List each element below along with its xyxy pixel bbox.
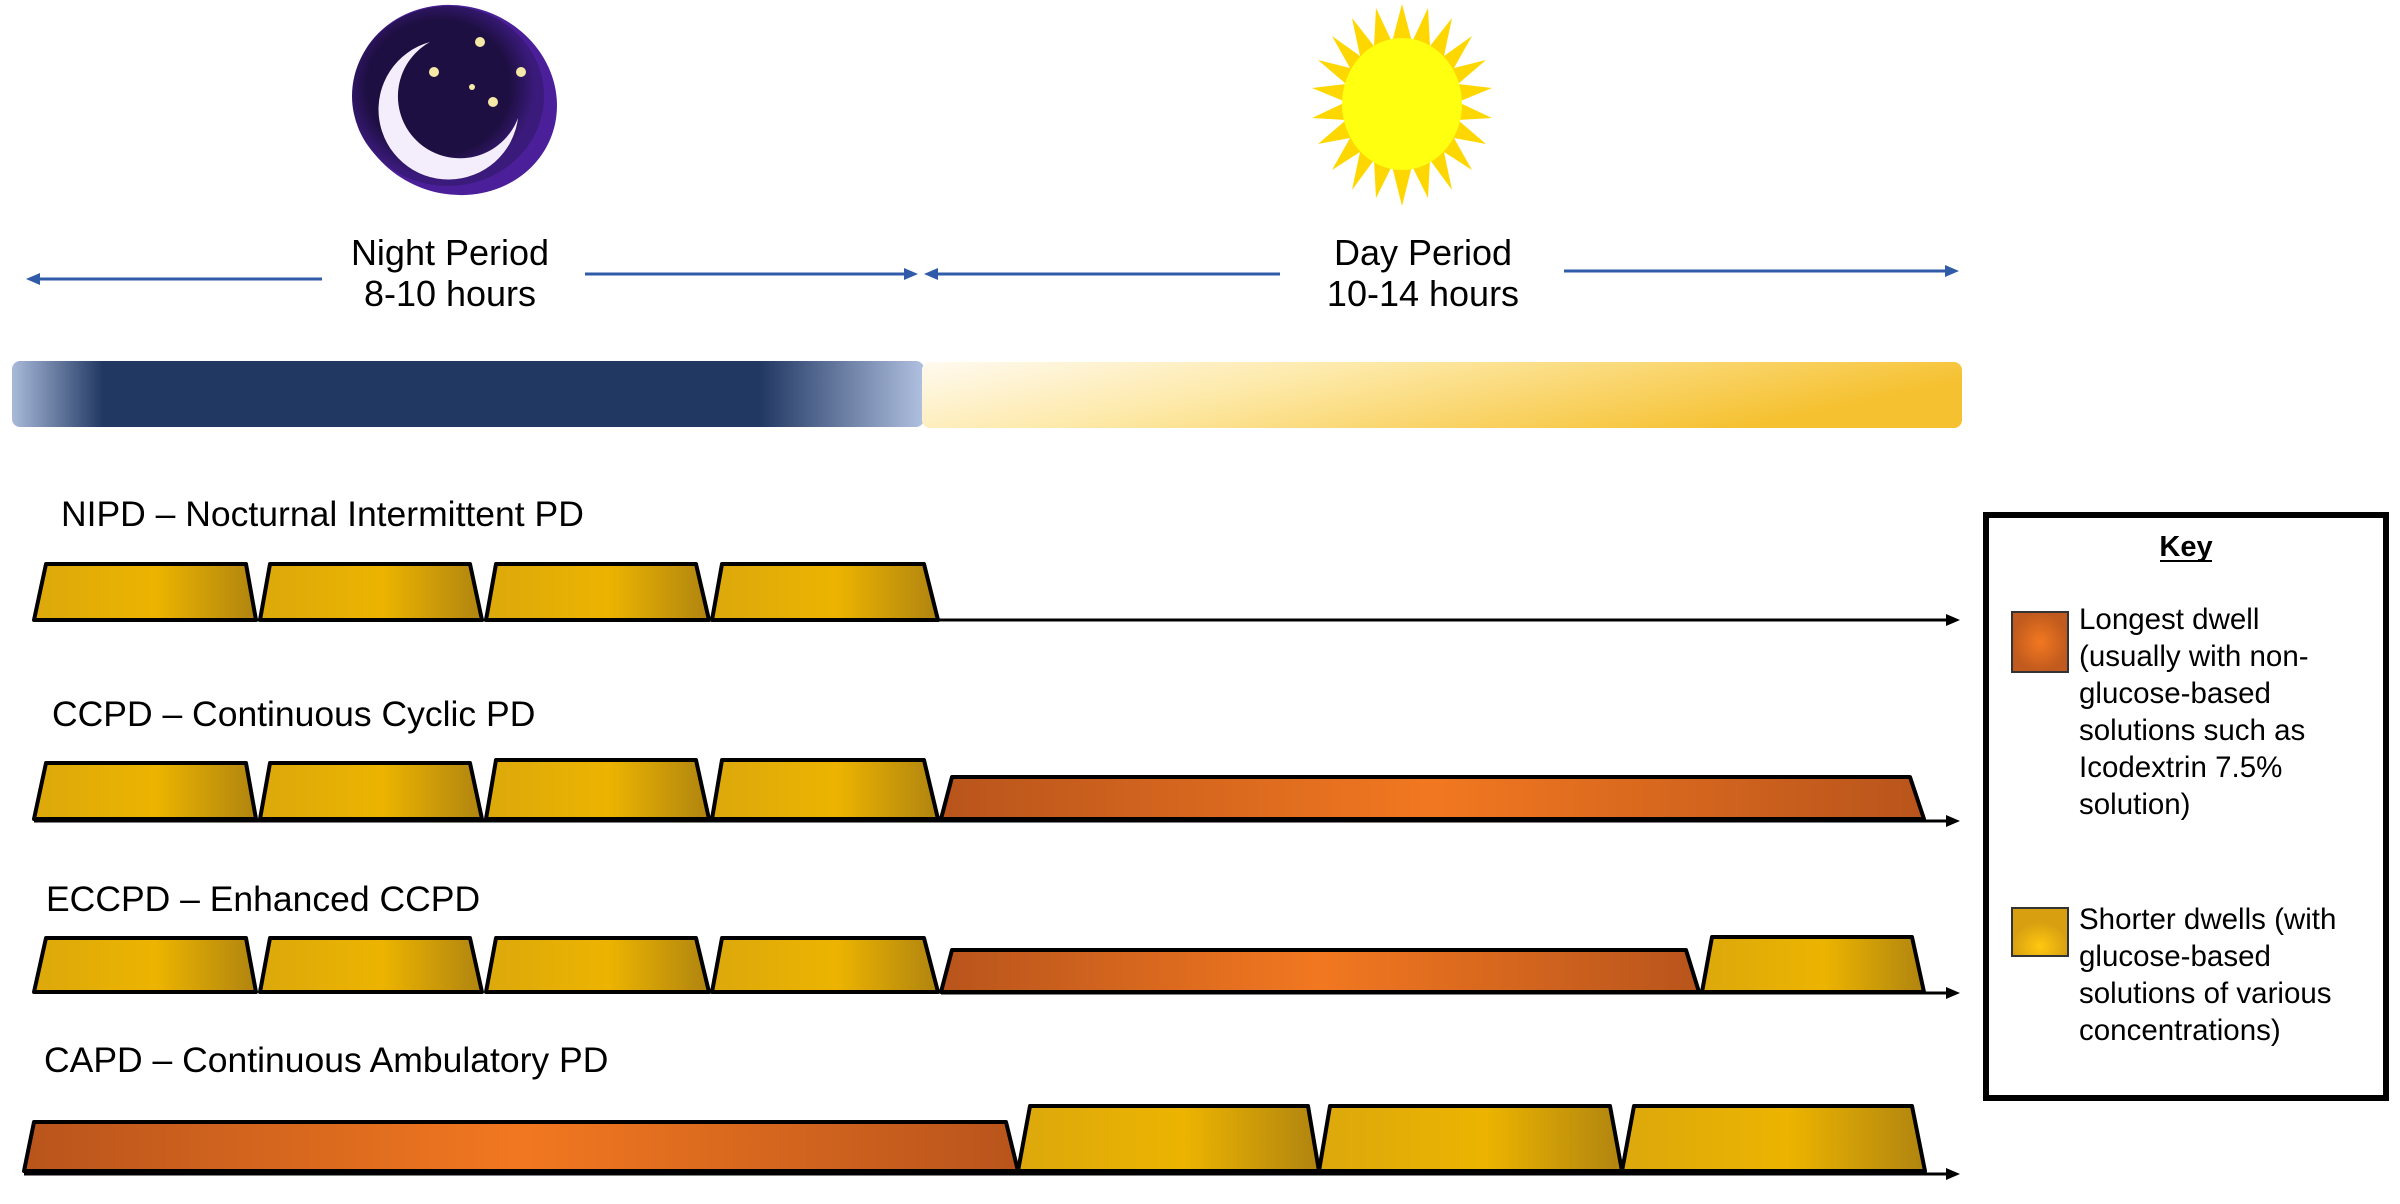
key swatch: shorter dwells (2012, 908, 2068, 956)
bar: day (922, 362, 1962, 428)
row: CAPD (24, 1040, 1960, 1180)
row: NIPD: NIPD – Nocturnal Intermittent PD (61, 494, 584, 534)
key text: longest dwell: Icodextrin 7.5% (2079, 751, 2282, 784)
key title: Key (2159, 531, 2213, 563)
key text: longest dwell: solution) (2079, 788, 2191, 821)
row: NIPD (34, 494, 1960, 626)
text: night period: 8-10 hours (364, 273, 536, 314)
key text: shorter dwells: Shorter dwells (with (2079, 903, 2336, 936)
key text: longest dwell: Longest dwell (2079, 603, 2259, 636)
icon: moon (326, 0, 584, 224)
bar: night (12, 361, 924, 427)
key text: longest dwell: glucose-based (2079, 677, 2271, 710)
row: ECCPD (34, 879, 1960, 999)
key swatch: longest dwell (2012, 612, 2068, 672)
row: CCPD: CCPD – Continuous Cyclic PD (52, 694, 535, 734)
key text: longest dwell: solutions such as (2079, 714, 2305, 747)
row: ECCPD: ECCPD – Enhanced CCPD (46, 879, 480, 919)
key text: shorter dwells: glucose-based (2079, 940, 2271, 973)
text: day period: 10-14 hours (1327, 273, 1519, 314)
key text: longest dwell: (usually with non- (2079, 640, 2309, 673)
key text: shorter dwells: solutions of various (2079, 977, 2332, 1010)
text: day period: Day Period (1334, 232, 1512, 273)
icon: sun (1312, 4, 1492, 206)
arrows: night period span (26, 268, 918, 285)
row: CCPD (34, 694, 1960, 827)
panel: key (1986, 515, 2386, 1098)
key text: shorter dwells: concentrations) (2079, 1014, 2281, 1047)
row: CAPD: CAPD – Continuous Ambulatory PD (44, 1040, 608, 1080)
text: night period: Night Period (351, 232, 549, 273)
arrows: day period span (924, 265, 1959, 280)
